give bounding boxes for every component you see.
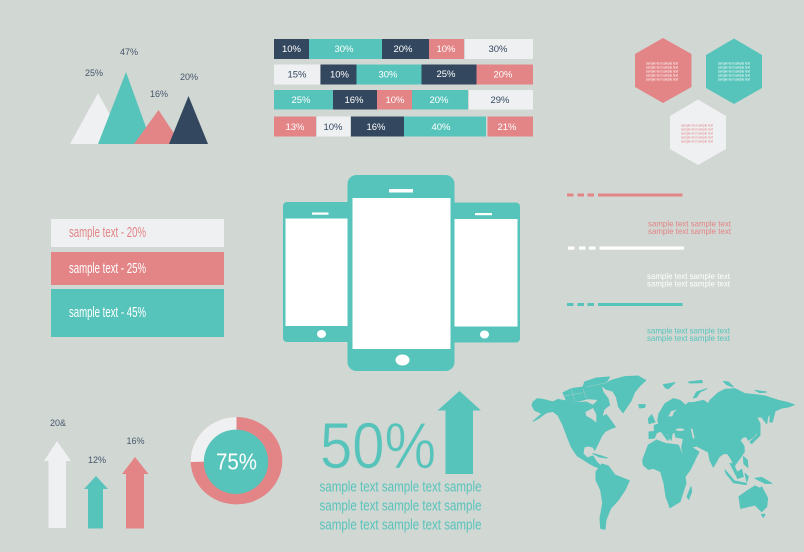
bar row 4: 10% [323, 122, 343, 133]
phone: right [450, 202, 520, 342]
world map [532, 376, 794, 529]
africa [643, 440, 695, 508]
south america [596, 464, 629, 529]
hexagon: pink: sample text sample text [646, 62, 678, 66]
dashed row: white: sample text sample text [647, 278, 731, 288]
sakhalin [770, 411, 775, 422]
dashed row: white: sample text sample text [647, 271, 731, 281]
big 50% callout [320, 391, 482, 534]
phone: centre [348, 175, 454, 371]
hexagon: pink [635, 38, 692, 103]
label bar: 45% [51, 289, 224, 337]
caribbean islands [593, 454, 607, 458]
tasmania [761, 514, 765, 517]
arrow: pink: 16% [126, 436, 145, 446]
bar row 1: 20% [393, 44, 413, 55]
hexagon: white: sample text sample text [681, 136, 713, 140]
bar row 3: 10% [385, 95, 405, 106]
donut chart [191, 417, 282, 504]
bar row 3: 20% [429, 95, 449, 106]
arrow chart [44, 418, 148, 528]
label bar: 25%: sample text - 25% [69, 260, 146, 277]
iceland [639, 405, 645, 408]
bar row 1: 10% [436, 44, 456, 55]
hexagon: teal: sample text sample text [718, 62, 750, 66]
bar row 4: 13% [285, 122, 305, 133]
bar row 4: 16% [366, 122, 386, 133]
bar row 3: 25% [291, 95, 311, 106]
hexagon: white: sample text sample text [681, 140, 713, 144]
caspian sea [691, 429, 695, 439]
bar row 2: 10% [330, 70, 350, 80]
phones [283, 175, 520, 371]
map: southern continents [596, 440, 772, 529]
bar row 1: 10% [282, 44, 302, 55]
donut chart: 75% [216, 448, 257, 474]
caption lines: sample text sample text sample [320, 478, 482, 496]
dashed row: teal: sample text sample text [647, 326, 731, 336]
hexagon: pink: sample text sample text [646, 70, 678, 74]
hexagon: teal: sample text sample text [718, 66, 750, 70]
map: americas north and greenland [532, 376, 646, 469]
bar row 3: 29% [490, 95, 510, 106]
black sea [676, 428, 684, 431]
triangle: 16%: 16% [150, 89, 168, 99]
triangle: 47%: 47% [120, 47, 138, 57]
triangle: 25%: 25% [85, 68, 103, 78]
dashed row: pink [567, 194, 732, 236]
hexagon: white [670, 100, 726, 165]
bar row 3 [274, 90, 533, 110]
label bar: 45%: sample text - 45% [69, 304, 146, 321]
arctic islands [563, 377, 610, 405]
hexagon: white: sample text sample text [681, 124, 713, 128]
north america [532, 399, 615, 469]
hexagon: pink: sample text sample text [646, 78, 678, 82]
dashed row: teal [567, 303, 731, 343]
big number: 50% [320, 409, 436, 482]
dashed row: pink: sample text sample text [648, 218, 732, 228]
bar row 2 [274, 64, 533, 84]
hexagon: teal: sample text sample text [718, 78, 750, 82]
bar row 1: 30% [334, 44, 354, 55]
british isles [648, 415, 655, 424]
horizontal label bars [51, 219, 224, 337]
bar row 1: 30% [488, 44, 508, 55]
australia [739, 486, 768, 512]
bar row 2: 25% [436, 69, 456, 80]
hexagon: teal: sample text sample text [718, 74, 750, 78]
label bar: 20% [51, 219, 224, 247]
arctic russian islands [663, 380, 767, 398]
icon: up arrow [438, 391, 481, 474]
bar row 2: 20% [493, 70, 513, 80]
arrow: teal: 12% [88, 455, 106, 465]
stacked bars [274, 39, 533, 136]
southeast asian islands [725, 457, 772, 485]
caption lines [320, 478, 482, 534]
hexagon: teal: sample text sample text [718, 70, 750, 74]
hexagon: white: sample text sample text [681, 132, 713, 136]
bar row 2: 15% [287, 70, 307, 80]
bar row 3: 16% [344, 95, 364, 106]
japan [750, 424, 760, 444]
caption lines: sample text sample text sample [320, 516, 482, 534]
bar row 1 [274, 39, 533, 59]
arrow: white: 20& [50, 418, 66, 428]
hexagons [635, 38, 762, 165]
eurasia mainland [649, 389, 794, 467]
caption lines: sample text sample text sample [320, 498, 482, 514]
dashed row: pink: sample text sample text [648, 226, 732, 236]
triangle: 20%: 20% [180, 72, 198, 82]
arctic channels [565, 383, 606, 400]
bar row 4: 40% [431, 122, 451, 133]
map: eurasia [648, 380, 794, 467]
phone: left [283, 202, 353, 342]
hexagon: white: sample text sample text [681, 128, 713, 132]
dashed row: white [568, 246, 731, 288]
greenland [602, 376, 646, 413]
triangle chart [70, 47, 208, 144]
hexagon: teal [706, 38, 762, 104]
label bar: 20%: sample text - 20% [69, 224, 146, 241]
hudson bay [585, 408, 596, 423]
bar row 4 [274, 116, 533, 136]
hexagon: pink: sample text sample text [646, 66, 678, 70]
hexagon: pink: sample text sample text [646, 74, 678, 78]
dashed text rows [567, 194, 732, 343]
bar row 2: 30% [378, 70, 398, 80]
dashed row: teal: sample text sample text [647, 333, 731, 343]
baltic sea [668, 409, 677, 416]
label bar: 25% [51, 252, 224, 285]
bar row 4: 21% [497, 122, 517, 133]
madagascar [687, 487, 692, 499]
